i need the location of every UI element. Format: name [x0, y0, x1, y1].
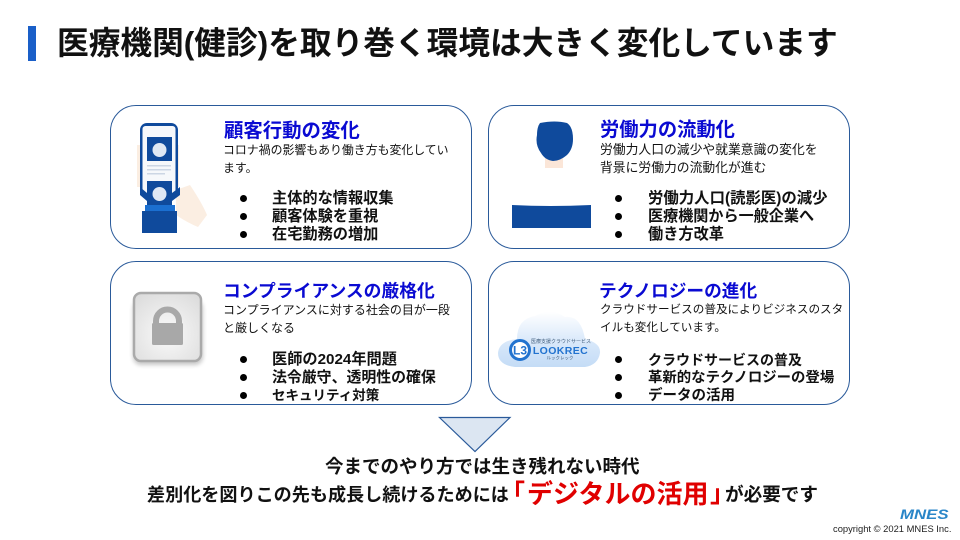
description: technology evolution [600, 303, 843, 334]
bullet list: customer behaviour: 顧客体験を重視 [272, 208, 378, 225]
bullet list: technology evolution: データの活用 [648, 388, 735, 404]
conclusion line 2 with highlight [147, 479, 818, 509]
title accent bar [28, 26, 36, 61]
conclusion line 2 with highlight: 「 [500, 480, 525, 508]
arrow: downward triangle [438, 416, 512, 452]
bullet list: labour mobility: 働き方改革 [648, 226, 724, 243]
description: customer behaviour: コロナ禍の影響もあり働き方も変化してい [223, 143, 449, 157]
panel: customer behaviour [110, 105, 472, 249]
conclusion line 2 with highlight: デジタルの活用 [527, 479, 708, 509]
description: customer behaviour: ます。 [223, 161, 257, 175]
description: labour mobility [600, 142, 818, 175]
copyright: copyright © 2021 MNES Inc. [833, 523, 951, 534]
bullet list: customer behaviour: 在宅勤務の増加 [272, 226, 378, 243]
icon: LOOKREC cloud logo: LOOKREC [533, 345, 588, 357]
panel: labour mobility [488, 105, 850, 249]
bullet list: labour mobility [615, 190, 828, 243]
bullet list: technology evolution [615, 352, 834, 404]
description: labour mobility: 背景に労働力の流動化が進む [600, 160, 766, 175]
icon: phone held in hand [137, 123, 207, 233]
heading: customer behaviour: 顧客行動の変化 [224, 120, 360, 142]
icon: LOOKREC cloud logo: 医療支援クラウドサービス [531, 338, 591, 345]
conclusion line 2 with highlight: 」 [710, 480, 735, 508]
icon: LOOKREC cloud logo: ルックレック [546, 356, 574, 362]
bullet list: customer behaviour [240, 190, 394, 243]
panel: technology evolution [488, 261, 850, 405]
heading: technology evolution: テクノロジーの進化 [599, 281, 757, 301]
heading: stricter compliance: コンプライアンスの厳格化 [223, 281, 435, 301]
heading: labour mobility: 労働力の流動化 [600, 120, 735, 141]
description: stricter compliance: コンプライアンスに対する社会の目が一段 [223, 303, 450, 317]
conclusion line 2 with highlight: が必要です [725, 484, 818, 505]
description: stricter compliance [223, 303, 450, 335]
bullet list: labour mobility: 医療機関から一般企業へ [648, 208, 814, 225]
icon: LOOKREC cloud logo: L3 [513, 344, 527, 358]
bullet list: customer behaviour: 主体的な情報収集 [272, 190, 394, 207]
title: 医療機関(健診)を取り巻く環境は大きく変化しています [57, 25, 838, 61]
panel: stricter compliance [110, 261, 472, 405]
bullet list: stricter compliance: 法令厳守、透明性の確保 [272, 370, 436, 386]
conclusion line 2 with highlight: 差別化を図りこの先も成長し続けるためには [147, 485, 509, 505]
bullet list: stricter compliance: 医師の2024年問題 [272, 351, 397, 368]
logo: MNES: MNES [900, 506, 949, 522]
description: technology evolution: クラウドサービスの普及によりビジネスのスタ [600, 303, 843, 316]
description: stricter compliance: と厳しくなる [223, 321, 295, 335]
description: labour mobility: 労働力人口の減少や就業意識の変化を [600, 142, 818, 157]
bullet list: labour mobility: 労働力人口(読影医)の減少 [648, 190, 828, 207]
icon: padlock [131, 292, 205, 367]
description: technology evolution: イルも変化しています。 [600, 321, 726, 334]
bullet list: technology evolution: 革新的なテクノロジーの登場 [648, 370, 834, 386]
bullet list: stricter compliance [240, 350, 436, 403]
conclusion line 1: 今までのやり方では生き残れない時代 [325, 456, 640, 477]
description: customer behaviour [223, 143, 449, 175]
icon: LOOKREC cloud logo [498, 318, 600, 367]
bullet list: stricter compliance: セキュリティ対策 [272, 388, 379, 403]
bullet list: technology evolution: クラウドサービスの普及 [648, 352, 802, 368]
icon: worker silhouette [512, 122, 591, 228]
